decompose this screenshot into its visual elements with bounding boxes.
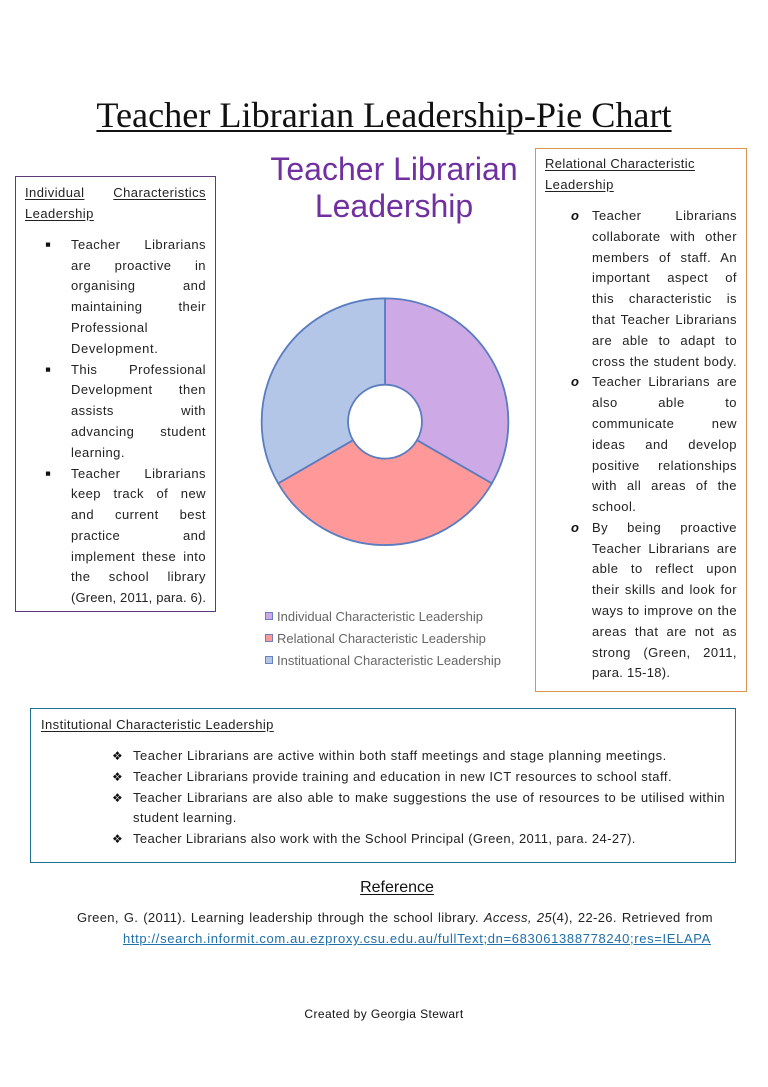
bullet list: relational characteristic: para. 15-18). bbox=[592, 665, 670, 680]
bullet list: relational characteristic: ways to improve on the bbox=[592, 603, 737, 618]
bullet list: relational characteristic: that Teacher Librarians bbox=[592, 312, 737, 327]
bullet list: relational characteristic: Teacher Librarians are bbox=[592, 374, 737, 389]
panel heading: institutional characteristic: Institutional Characteristic Leadership bbox=[41, 717, 274, 732]
bullet list: relational characteristic: areas that are not as bbox=[592, 624, 737, 639]
bullet list: relational characteristic: Teacher Librarians are bbox=[592, 541, 737, 556]
bullet list: individual characteristics: the school library bbox=[71, 569, 206, 584]
panel: relational characteristic bbox=[535, 148, 747, 692]
panel heading: relational characteristic: Relational Characteristic bbox=[545, 156, 695, 171]
bullet list: individual characteristics: keep track of new bbox=[71, 486, 206, 501]
bullet list: individual characteristics: are proactive in bbox=[71, 258, 206, 273]
bullet list: relational characteristic: o bbox=[571, 208, 579, 223]
bullet list: institutional characteristic: Teacher Librarians are active within both staff meetings and stage planning meetings. bbox=[133, 748, 667, 763]
bullet list: relational characteristic: members of staff. An bbox=[592, 250, 737, 265]
bullet list: relational characteristic: also able to bbox=[592, 395, 737, 410]
bullet list: individual characteristics: This Professional bbox=[71, 362, 206, 377]
bullet list: relational characteristic: their skills and look for bbox=[592, 582, 737, 597]
reference citation: Green, G. (2011). Learning leadership through the school library. Access, 25(4), 22-26. Retrieved from bbox=[77, 910, 713, 925]
bullet list: relational characteristic: o bbox=[571, 520, 579, 535]
bullet list: individual characteristics: Teacher Librarians bbox=[71, 237, 206, 252]
bullet list: relational characteristic: strong (Green, 2011, bbox=[592, 645, 737, 660]
bullet list: individual characteristics: Professional bbox=[71, 320, 148, 335]
bullet list: institutional characteristic: ❖ bbox=[112, 791, 123, 805]
bullet list: relational characteristic: By being proactive bbox=[592, 520, 737, 535]
bullet list: institutional characteristic: Teacher Librarians provide training and education in new ICT resources to school staff. bbox=[133, 769, 672, 784]
bullet list: institutional characteristic: Teacher Librarians also work with the School Principal (Green, 2011, para. 24-27). bbox=[133, 831, 636, 846]
bullet list: individual characteristics: practice and bbox=[71, 528, 206, 543]
panel: individual characteristics bbox=[15, 176, 216, 612]
bullet list: individual characteristics: Teacher Librarians bbox=[71, 466, 206, 481]
chart legend bbox=[265, 609, 501, 668]
bullet list: individual characteristics: organising and bbox=[71, 278, 206, 293]
panel heading: individual characteristics bbox=[25, 185, 206, 221]
bullet list: institutional characteristic: student learning. bbox=[133, 810, 237, 825]
bullet list: relational characteristic: ideas and develop bbox=[592, 437, 737, 452]
bullet list: relational characteristic: with all areas of the bbox=[592, 478, 737, 493]
legend item: individual: Individual Characteristic Leadership bbox=[277, 609, 483, 624]
bullet list: relational characteristic: o bbox=[571, 374, 579, 389]
bullet list: relational characteristic: important aspect of bbox=[592, 270, 737, 285]
bullet list: relational characteristic: collaborate with other bbox=[592, 229, 737, 244]
bullet list: institutional characteristic: Teacher Librarians are also able to make suggestions the use of resources to be utilised within bbox=[133, 790, 725, 805]
bullet list: individual characteristics: ▪ bbox=[45, 360, 51, 379]
bullet list: relational characteristic: cross the student body. bbox=[592, 354, 737, 369]
panel heading: relational characteristic bbox=[545, 156, 695, 192]
chart title: Leadership bbox=[315, 188, 473, 224]
legend item: relational: Relational Characteristic Leadership bbox=[277, 631, 486, 646]
donut chart bbox=[260, 298, 510, 546]
bullet list: institutional characteristic: ❖ bbox=[112, 832, 123, 846]
chart title: Teacher Librarian bbox=[270, 151, 518, 187]
credit: Created by Georgia Stewart bbox=[304, 1007, 464, 1021]
chart title bbox=[270, 151, 518, 224]
bullet list: institutional characteristic: ❖ bbox=[112, 770, 123, 784]
bullet list: institutional characteristic: ❖ bbox=[112, 749, 123, 763]
bullet list: relational characteristic: are able to adapt to bbox=[592, 333, 737, 348]
reference heading: Reference bbox=[360, 879, 434, 896]
panel: institutional characteristic bbox=[30, 708, 736, 863]
segment: institutional bbox=[262, 298, 385, 483]
bullet list: individual characteristics: learning. bbox=[71, 445, 125, 460]
reference citation bbox=[77, 910, 713, 946]
panel heading: individual characteristics: Leadership bbox=[25, 206, 94, 221]
bullet list: individual characteristics: Development. bbox=[71, 341, 158, 356]
segment: relational bbox=[278, 440, 492, 545]
bullet list: individual characteristics bbox=[45, 235, 206, 605]
bullet list: individual characteristics: Development then bbox=[71, 382, 206, 397]
bullet list: relational characteristic: positive relationships bbox=[592, 458, 737, 473]
bullet list: relational characteristic: able to reflect upon bbox=[592, 561, 737, 576]
bullet list: relational characteristic: communicate new bbox=[592, 416, 737, 431]
bullet list: individual characteristics: implement these into bbox=[71, 549, 206, 564]
bullet list: individual characteristics: advancing student bbox=[71, 424, 206, 439]
panel heading: relational characteristic: Leadership bbox=[545, 177, 614, 192]
bullet list: relational characteristic: school. bbox=[592, 499, 636, 514]
bullet list: relational characteristic: this characteristic is bbox=[592, 291, 737, 306]
legend item: institutional: Instituational Characteristic Leadership bbox=[277, 653, 501, 668]
bullet list: individual characteristics: ▪ bbox=[45, 464, 51, 483]
bullet list: individual characteristics: assists with bbox=[71, 403, 206, 418]
panel heading: individual characteristics: Individual Characteristics bbox=[25, 185, 206, 200]
bullet list: individual characteristics: and current best bbox=[71, 507, 206, 522]
bullet list: relational characteristic bbox=[571, 208, 737, 680]
bullet list: relational characteristic: Teacher Librarians bbox=[592, 208, 737, 223]
bullet list: individual characteristics: (Green, 2011, para. 6). bbox=[71, 590, 206, 605]
segment: individual bbox=[385, 298, 508, 483]
bullet list: institutional characteristic bbox=[112, 748, 725, 846]
title: Teacher Librarian Leadership-Pie Chart bbox=[96, 95, 672, 135]
bullet list: individual characteristics: ▪ bbox=[45, 235, 51, 254]
reference link: http://search.informit.com.au.ezproxy.csu.edu.au/fullText;dn=683061388778240;res=IELAPA bbox=[123, 931, 711, 946]
bullet list: individual characteristics: maintaining their bbox=[71, 299, 206, 314]
